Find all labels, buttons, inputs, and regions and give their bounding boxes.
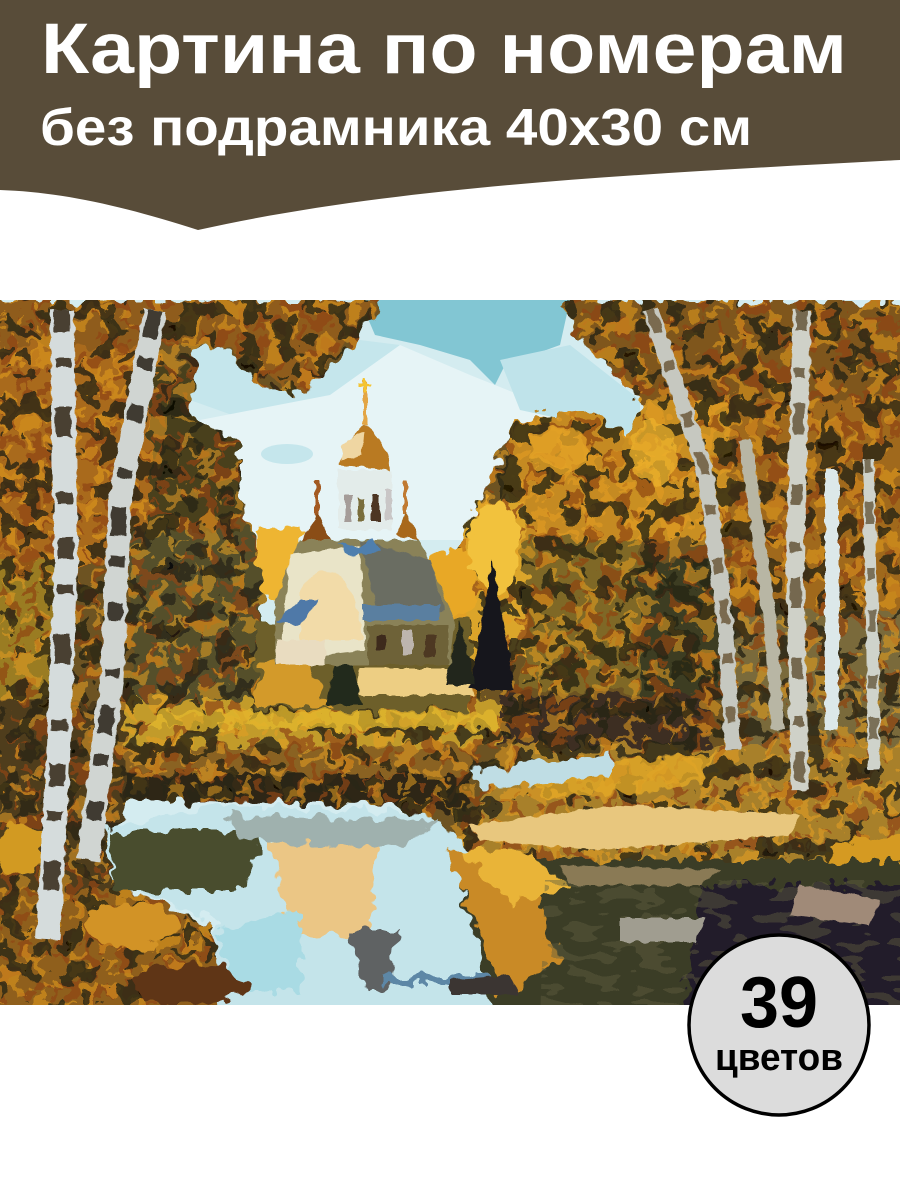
painting bbox=[0, 300, 900, 1040]
golden highlights bbox=[150, 423, 900, 875]
birch trunks bbox=[48, 310, 874, 940]
left lower orange bbox=[0, 886, 218, 1005]
right orange canopy bbox=[730, 400, 900, 610]
right golden crown bbox=[610, 400, 730, 540]
right dark forest bbox=[640, 560, 730, 700]
dark conifers bbox=[326, 560, 515, 705]
pale forest path bbox=[355, 668, 800, 850]
mottled dark bank bbox=[540, 880, 900, 1005]
left foreground accents bbox=[0, 824, 250, 1005]
left lower dark bbox=[0, 700, 125, 890]
dark creek hollow bbox=[500, 695, 710, 745]
central yellow tree bbox=[505, 410, 625, 540]
header banner bbox=[0, 0, 900, 230]
yellow meadow bbox=[125, 700, 510, 745]
golden brown riverbank bbox=[125, 745, 470, 775]
water bbox=[104, 750, 614, 1005]
sky bbox=[1, 300, 900, 935]
dark shoreline bbox=[115, 775, 470, 810]
dark lower right bank bbox=[444, 846, 900, 1005]
badge: 39 colours bbox=[689, 935, 869, 1115]
left orange canopy bbox=[0, 300, 380, 395]
right upper canopy bbox=[560, 300, 900, 400]
left edge yellow bbox=[0, 558, 55, 706]
left olive shrubs bbox=[130, 530, 265, 705]
subtitle: без подрамника 40х30 см bbox=[40, 99, 752, 157]
church bbox=[275, 378, 455, 665]
foliage masses, mottled bbox=[0, 300, 900, 1020]
golden right bank bbox=[450, 745, 900, 860]
badge: 39 colours: цветов bbox=[715, 1037, 843, 1079]
left dark green tree bbox=[150, 370, 240, 540]
pale rocks bbox=[450, 865, 880, 995]
title: Картина по номерам bbox=[41, 10, 847, 89]
badge: 39 colours: 39 bbox=[740, 963, 818, 1043]
right pale olive bbox=[730, 610, 900, 760]
shrubs around the church base bbox=[250, 525, 478, 710]
left middle tree bbox=[0, 345, 160, 560]
